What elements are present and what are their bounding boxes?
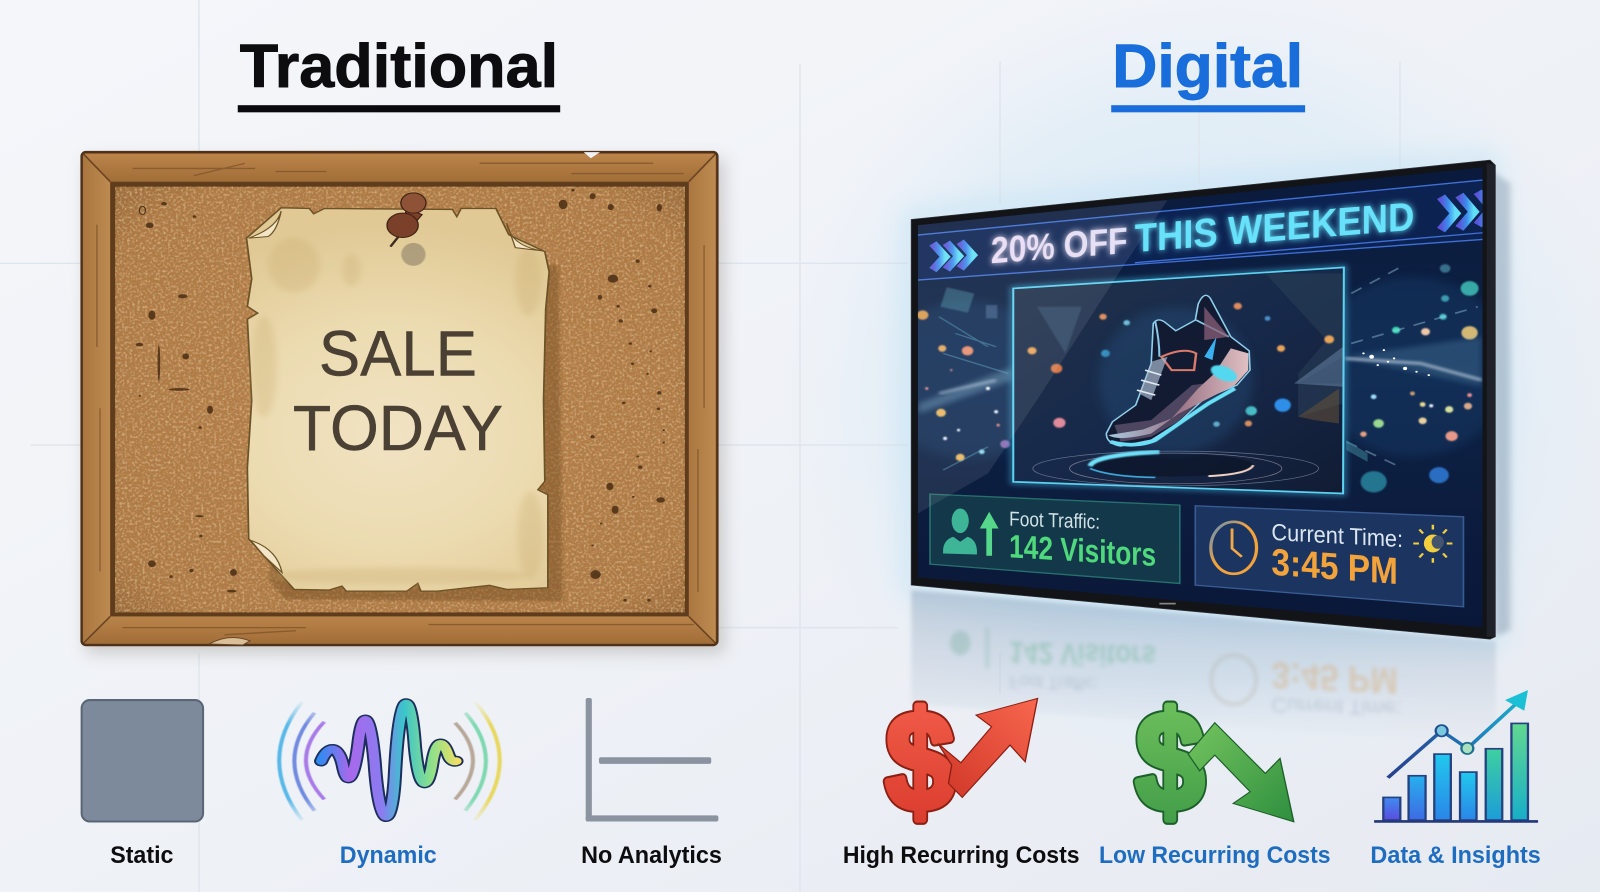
title: Digital: Digital	[1112, 32, 1303, 100]
panel: cork board with wooden frame	[82, 152, 724, 653]
label: Dynamic: Dynamic	[340, 842, 437, 869]
icon: high recurring costs: $	[886, 683, 954, 839]
left particles	[917, 287, 1010, 461]
cork surface	[110, 182, 689, 616]
foot traffic label: Foot Traffic:	[1009, 509, 1100, 534]
label: Data & Insights: Data & Insights	[1370, 842, 1541, 869]
chevrons: left	[933, 242, 972, 270]
icon: no analytics empty chart	[586, 698, 718, 822]
foot traffic panel	[930, 494, 1180, 583]
icon: high recurring costs: $	[886, 683, 954, 839]
monitor hardware	[878, 160, 1510, 639]
right particles	[1360, 264, 1479, 492]
monitor glow	[911, 160, 1496, 639]
wooden frame	[82, 152, 717, 645]
foot traffic value: 142 Visitors	[1009, 527, 1156, 573]
label: No Analytics: No Analytics	[581, 842, 722, 869]
current time value: 3:45 PM	[1271, 542, 1398, 593]
pin shadow	[401, 243, 426, 266]
shoe	[1098, 295, 1253, 453]
icon: dynamic wave	[279, 702, 500, 820]
label: Static: Static	[110, 842, 173, 869]
monitor reflection: 3:45 PM	[1271, 654, 1398, 702]
sun and moon icon	[1413, 525, 1452, 563]
clock icon	[1211, 522, 1257, 574]
time panel	[1195, 506, 1463, 607]
monitor reflection: Current Time:	[1271, 693, 1402, 719]
paper sign	[246, 193, 563, 601]
icon: static square	[82, 700, 203, 822]
headline: THIS WEEKEND: THIS WEEKEND	[1135, 195, 1414, 261]
paper shadow	[268, 265, 563, 601]
monitor reflection	[911, 590, 1496, 745]
chevrons: right	[1441, 192, 1492, 230]
screen background	[918, 167, 1483, 627]
product frame	[1013, 267, 1344, 493]
up arrow	[980, 512, 999, 556]
icon: data and insights chart	[1374, 690, 1538, 823]
headline: 20% OFF: 20% OFF	[991, 220, 1128, 271]
sale text: SALE	[319, 318, 477, 390]
podium rings	[1033, 451, 1319, 486]
icon: high recurring costs	[886, 683, 1038, 839]
label: High Recurring Costs: High Recurring Costs	[843, 842, 1080, 869]
glass glare	[918, 200, 1168, 513]
icon: low recurring costs: $	[1136, 683, 1204, 839]
push pin	[387, 193, 426, 247]
monitor reflection: 142 Visitors	[1009, 635, 1156, 673]
paper sign: TODAY	[293, 392, 503, 464]
monitor reflection: Foot Traffic:	[1009, 672, 1099, 695]
label: Low Recurring Costs: Low Recurring Costs	[1099, 842, 1331, 869]
person icon	[943, 508, 977, 554]
icon: low recurring costs	[1136, 683, 1294, 839]
icon: low recurring costs: $	[1136, 683, 1204, 839]
panel: digital display monitor	[878, 160, 1510, 745]
title: Traditional: Traditional	[240, 32, 558, 100]
banner band	[918, 180, 1483, 280]
current time label: Current Time:	[1271, 519, 1403, 552]
